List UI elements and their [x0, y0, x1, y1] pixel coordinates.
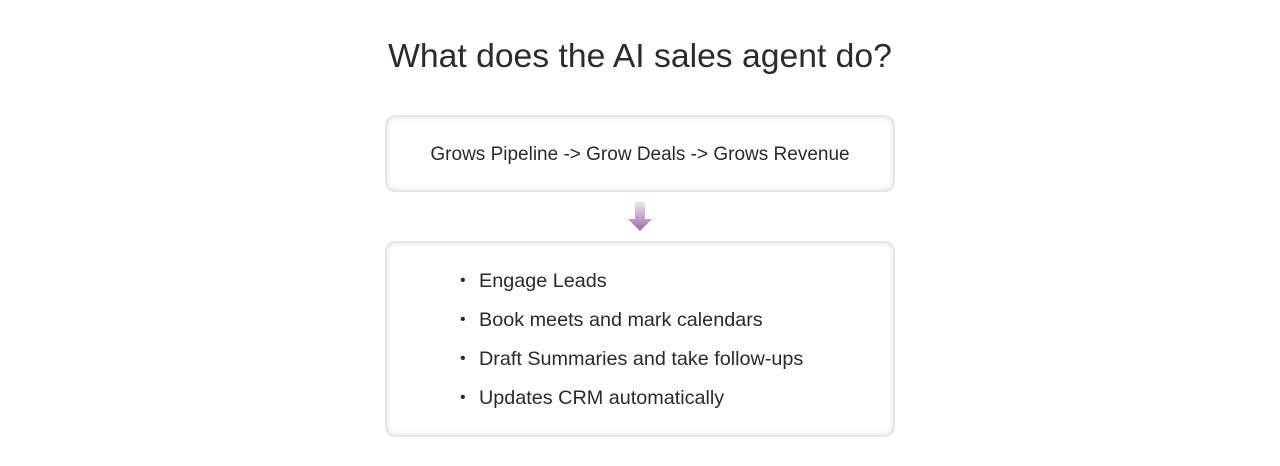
panel: flow summary: Grows Pipeline -> Grow Deals -> Grows Revenue: [430, 144, 850, 165]
list: actions: [460, 270, 803, 409]
panel: flow summary: [385, 115, 895, 192]
list: actions: Engage Leads: [479, 270, 607, 292]
title: What does the AI sales agent do?: [388, 37, 892, 75]
panel: actions: [385, 241, 895, 437]
list: actions: Draft Summaries and take follow-ups: [479, 348, 803, 370]
arrow: down: [628, 202, 652, 231]
list: actions: Book meets and mark calendars: [479, 309, 763, 331]
list: actions: Updates CRM automatically: [479, 387, 724, 409]
